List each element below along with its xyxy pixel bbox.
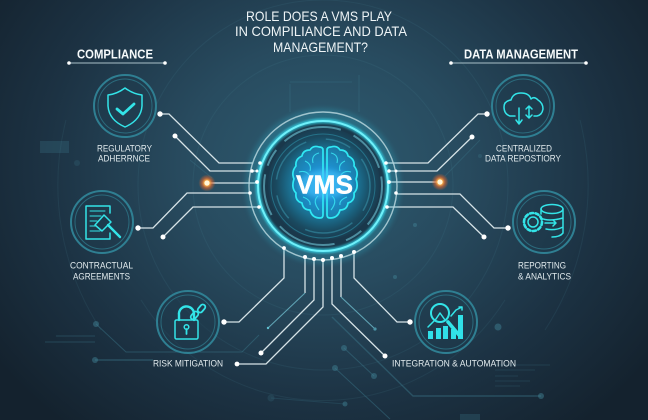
title: IN COMPILIANCE AND DATA bbox=[235, 23, 408, 39]
risk mitigation bbox=[153, 291, 223, 368]
label: regulatory adherence: ADHERRNCE bbox=[98, 154, 150, 164]
icon: contract and gavel bbox=[86, 206, 120, 239]
heading: data management: DATA MANAGEMENT bbox=[464, 48, 578, 62]
label: contractual agreements: CONTRACTUAL bbox=[70, 260, 133, 270]
label: centralized data repository: CENTRALIZED bbox=[496, 144, 552, 154]
icon: bars and magnifier bbox=[428, 304, 463, 339]
integration and automation bbox=[392, 291, 516, 368]
VMS text glow bbox=[299, 170, 351, 198]
icon: padlock and chain bbox=[175, 303, 206, 339]
reporting and analytics bbox=[513, 191, 575, 282]
label: contractual agreements: AGREEMENTS bbox=[73, 272, 130, 282]
brain icon bbox=[293, 146, 357, 218]
title bbox=[235, 8, 408, 55]
VMS text: VMS bbox=[296, 172, 353, 200]
icon: shield bbox=[108, 88, 142, 127]
label: regulatory adherence: REGULATORY bbox=[97, 144, 152, 154]
heading: compliance bbox=[67, 48, 167, 65]
label: contractual agreements bbox=[70, 260, 133, 282]
regulatory adherence bbox=[94, 75, 156, 164]
label: regulatory adherence bbox=[97, 144, 152, 164]
label: integration and automation: INTEGRATION & AUTOMATION bbox=[392, 358, 516, 368]
label: reporting and analytics: & ANALYTICS bbox=[518, 272, 571, 282]
icon: cloud with arrows bbox=[504, 93, 543, 124]
centralized data repository bbox=[485, 75, 561, 164]
title: ROLE DOES A VMS PLAY bbox=[246, 8, 393, 24]
label: risk mitigation: RISK MITIGATION bbox=[153, 358, 223, 368]
orange node left bbox=[198, 174, 216, 192]
title: MANAGEMENT? bbox=[273, 39, 368, 55]
connector lines bbox=[135, 111, 511, 366]
heading: compliance: COMPLIANCE bbox=[77, 48, 153, 62]
orange node right bbox=[432, 174, 448, 190]
icon: gear and database bbox=[524, 204, 563, 237]
label: reporting and analytics bbox=[518, 260, 571, 282]
contractual agreements bbox=[70, 191, 133, 282]
label: centralized data repository bbox=[485, 144, 561, 164]
label: reporting and analytics: REPORTING bbox=[518, 260, 566, 270]
label: centralized data repository: DATA REPOSTIORY bbox=[485, 154, 561, 164]
central VMS hub bbox=[245, 108, 401, 264]
